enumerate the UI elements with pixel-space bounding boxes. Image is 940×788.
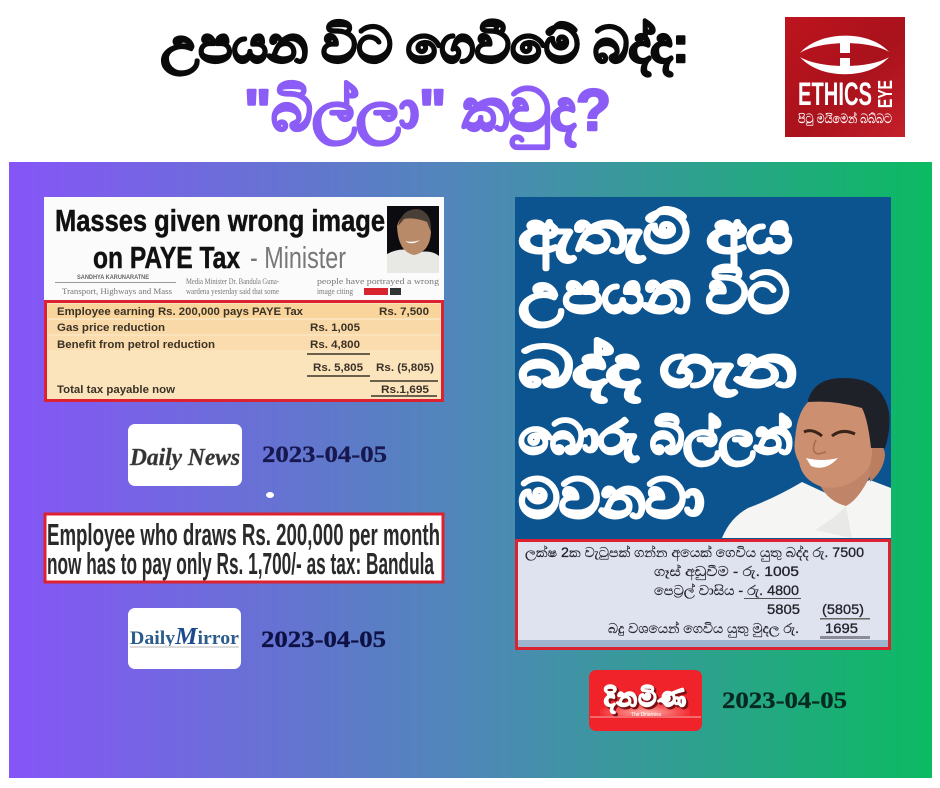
- table row: salary: ලක්ෂ 2ක වැටුපක් ගන්න අයෙක් ගෙවිය යුතු බද්ද රු. 7500: [525, 545, 864, 562]
- table row: petrol: Benefit from petrol reduction: [57, 339, 215, 351]
- panel: Daily News clipping: wardena yesterday said that some: [186, 287, 279, 296]
- title line 2: "බිල්ලා" කවුද?: [244, 78, 611, 149]
- icon: eye: [800, 36, 889, 74]
- byline and body text: SANDHYA KARUNARATNE: [77, 274, 150, 281]
- table row: employee earning: Employee earning Rs. 200,000 pays PAYE Tax: [57, 306, 304, 318]
- big headline: උපයන විට: [519, 261, 789, 327]
- big headline: බොරු බිල්ලන්: [519, 411, 792, 466]
- logo: Dinamina: The Dinamina: [631, 712, 661, 718]
- panel: Dinamina graphic: [515, 197, 891, 542]
- table: PAYE tax calculation: Rs. 4,800: [310, 339, 360, 351]
- headline: Masses given wrong image: [55, 203, 385, 238]
- title: [161, 17, 689, 149]
- logo tagline: පිටු මයිමෙන් බබ්බට: [798, 111, 892, 126]
- panel: Daily News clipping: Transport, Highways and Mass: [62, 286, 172, 296]
- date: Daily News: 2023-04-05: [262, 442, 387, 467]
- panel: Daily News clipping: image citing: [317, 287, 353, 296]
- logo: Ethics Eye: EYE: [875, 80, 897, 108]
- logo: Ethics Eye: [785, 17, 905, 137]
- title line 1: උපයන විට ගෙවීමේ බද්ද:: [161, 17, 689, 77]
- Dinamina wordmark shadow: දිනමිණ: [606, 686, 688, 716]
- table row: total: බදු වශයෙන් ගෙවිය යුතු මුදල රු.: [608, 621, 799, 638]
- table: PAYE tax calculation: Rs. 7,500: [379, 306, 429, 318]
- background panel: [9, 162, 932, 778]
- table: Sinhala tax calculation: [516, 540, 890, 648]
- Dinamina wordmark: දිනමිණ: [604, 684, 686, 714]
- table row: subtotal: 5805: [767, 602, 800, 617]
- table row: subtotal: Rs. 5,805: [313, 362, 363, 374]
- table: PAYE tax calculation: Rs. (5,805): [376, 362, 434, 374]
- panel: Daily News clipping: Media Minister Dr. Bandula Guna-: [186, 277, 279, 286]
- panel: Daily Mirror clipping: now has to pay only Rs. 1,700/- as tax: Bandula: [47, 546, 434, 581]
- clipping headline: Employee who draws Rs. 200,000 per month: [47, 517, 440, 552]
- panel: Daily News clipping: [44, 197, 444, 300]
- icon: minister portrait: [722, 378, 891, 538]
- big headline: බද්ද ගැන: [519, 335, 796, 402]
- date: Daily Mirror: 2023-04-05: [261, 627, 386, 652]
- table row: total: Total tax payable now: [57, 384, 175, 396]
- logo: Daily News: [128, 424, 242, 486]
- white dot: [266, 492, 274, 498]
- logo: Daily Mirror: DailyMirror: [130, 624, 240, 650]
- panel: Daily News clipping: on PAYE Tax: [93, 240, 241, 275]
- big headline: [519, 201, 796, 529]
- logo: Dinamina: [589, 670, 702, 731]
- logo wordmark: ETHICS: [798, 76, 872, 112]
- big headline: මවනවා: [519, 469, 704, 529]
- icon: minister portrait: [387, 206, 439, 273]
- table row: gas: ගෑස් අඩුවීම - රු. 1005: [654, 564, 799, 581]
- table row: gas: Gas price reduction: [57, 322, 165, 334]
- table: Sinhala tax calculation: 1695: [825, 621, 858, 636]
- table: Sinhala tax calculation: (5805): [822, 602, 864, 617]
- big headline: ඇතැම් අය: [519, 201, 792, 270]
- table row: petrol: පෙට්‍රල් වාසිය - රු. 4800: [654, 583, 799, 599]
- panel: Daily Mirror clipping: [45, 514, 443, 582]
- table: PAYE tax calculation: Rs.1,695: [381, 384, 429, 396]
- panel: Daily News clipping: - Minister: [250, 240, 346, 275]
- logo: Daily Mirror: [128, 608, 241, 669]
- logo: Daily News: Daily News: [129, 445, 240, 471]
- table: PAYE tax calculation: Rs. 1,005: [310, 322, 360, 334]
- table: PAYE tax calculation: [46, 302, 442, 400]
- date: Dinamina: 2023-04-05: [722, 688, 847, 713]
- panel: Daily News clipping: people have portrayed a wrong: [317, 277, 439, 286]
